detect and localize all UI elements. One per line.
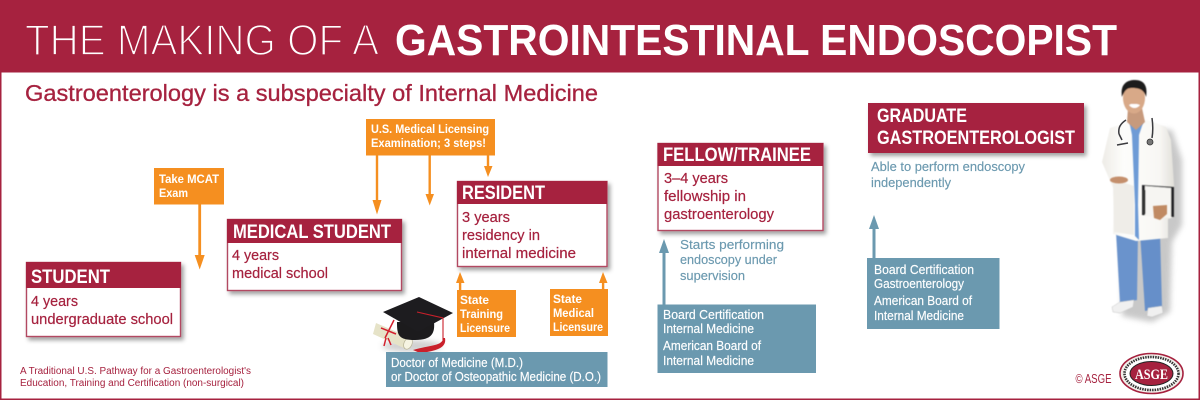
footnote: A Traditional U.S. Pathway for a Gastroenterologist's — [20, 366, 251, 377]
note: able to perform endoscopy: independently — [871, 175, 951, 190]
callout: state medical licensure with arrow: Medical — [553, 306, 594, 320]
title banner: GASTROINTESTINAL ENDOSCOPIST — [395, 16, 1117, 65]
head — [1122, 80, 1147, 130]
panel: board certification internal medicine: American Board of — [663, 339, 761, 353]
note: starts performing endoscopy: supervision — [680, 268, 745, 283]
doctor shadow — [1122, 128, 1182, 322]
arrow: graduate board certification — [869, 215, 879, 259]
callout: MCAT exam with arrow: Exam — [159, 186, 188, 200]
note: starts performing endoscopy — [680, 237, 784, 283]
panel: degree: Doctor of Medicine (M.D.) — [391, 356, 523, 370]
panel: degree — [386, 352, 608, 387]
stethoscope — [1117, 118, 1153, 145]
fellow details: gastroenterology — [664, 206, 774, 223]
panel: board certification internal medicine: Internal Medicine — [663, 322, 754, 336]
title banner — [0, 0, 1200, 72]
scrub top — [1129, 120, 1144, 240]
arrow: fellow board certification — [659, 239, 669, 305]
callout: MCAT exam with arrow: Take MCAT — [159, 172, 220, 186]
panel: board certification internal medicine — [658, 304, 816, 373]
resident details: residency in — [462, 227, 540, 244]
hand on clipboard — [1153, 205, 1167, 220]
panel: fellow trainee — [658, 143, 823, 230]
note: able to perform endoscopy — [871, 159, 1025, 190]
panel: resident — [457, 181, 607, 266]
panel: board certification gastroenterology: American Board of — [874, 294, 972, 308]
student details: 4 years — [31, 293, 78, 310]
hand in pocket — [1110, 176, 1128, 184]
callout: licensing exam with arrows: U.S. Medical Licensing — [371, 122, 489, 136]
shoes — [1112, 300, 1163, 317]
panel: graduate gastroenterologist: GASTROENTEROLOGIST — [877, 128, 1075, 149]
callout: state training licensure with arrow: State — [460, 293, 489, 307]
resident details: internal medicine — [462, 245, 576, 262]
medical student details — [232, 247, 328, 282]
panel: board certification gastroenterology — [867, 258, 1000, 329]
panel: board certification internal medicine: Board Certification — [663, 308, 764, 322]
resident details — [462, 209, 576, 262]
fellow details: 3–4 years — [664, 170, 728, 187]
illustration: doctor — [1102, 80, 1182, 322]
subtitle: Gastroenterology is a subspecialty of Internal Medicine — [25, 80, 598, 106]
footnote: Education, Training and Certification (non-surgical) — [20, 378, 244, 389]
panel: board certification gastroenterology: Gastroenterology — [874, 277, 965, 291]
trousers — [1116, 232, 1162, 311]
fellow details: fellowship in — [664, 188, 746, 205]
panel: degree: or Doctor of Osteopathic Medicine (D.O.) — [391, 370, 601, 384]
panel: student — [26, 262, 181, 336]
callout: state medical licensure with arrow: State — [553, 292, 582, 306]
logo: ASGE seal: ASGE — [1135, 367, 1168, 383]
panel: board certification internal medicine: Internal Medicine — [663, 354, 754, 368]
callout: state training licensure with arrow: Licensure — [460, 321, 510, 335]
callout: state medical licensure with arrow: Licensure — [553, 320, 603, 334]
copyright: © ASGE — [1076, 372, 1112, 386]
title banner: THE MAKING OF A — [25, 16, 380, 65]
callout: licensing exam with arrows: Examination; 3 steps! — [371, 136, 486, 150]
callout: state training licensure with arrow: Training — [460, 307, 503, 321]
icon: graduation cap and diploma — [373, 297, 453, 353]
callout: state medical licensure with arrow — [550, 272, 608, 336]
panel: graduate gastroenterologist — [868, 103, 1084, 153]
panel: board certification gastroenterology: Internal Medicine — [874, 309, 964, 323]
note: starts performing endoscopy: endoscopy under — [680, 252, 778, 267]
panel: board certification gastroenterology: Board Certification — [874, 263, 974, 277]
medical student details: 4 years — [232, 247, 279, 264]
student heading: STUDENT — [31, 267, 110, 288]
lab coat — [1102, 120, 1174, 241]
fellow heading: FELLOW/TRAINEE — [663, 145, 811, 166]
callout: state training licensure with arrow — [456, 272, 516, 337]
clipboard — [1142, 185, 1174, 218]
panel: graduate gastroenterologist: GRADUATE — [877, 106, 967, 127]
logo: ASGE seal — [1120, 354, 1183, 394]
student details — [31, 293, 173, 328]
resident heading: RESIDENT — [462, 183, 545, 204]
callout: MCAT exam with arrow — [154, 168, 224, 270]
student details: undergraduate school — [31, 311, 173, 328]
medical student heading: MEDICAL STUDENT — [233, 222, 391, 243]
resident heading — [457, 181, 607, 204]
note: able to perform endoscopy: Able to perform endoscopy — [871, 159, 1025, 174]
mortarboard — [383, 297, 453, 353]
medical student details: medical school — [232, 265, 328, 282]
panel: medical student — [227, 219, 402, 290]
resident details: 3 years — [462, 209, 510, 226]
stethoscope chest piece — [1147, 139, 1153, 145]
callout: licensing exam with arrows — [366, 119, 495, 214]
footnote — [20, 366, 251, 389]
student heading — [26, 262, 181, 288]
diploma — [373, 320, 414, 351]
fellow details — [664, 170, 774, 223]
note: starts performing endoscopy: Starts performing — [680, 237, 784, 252]
